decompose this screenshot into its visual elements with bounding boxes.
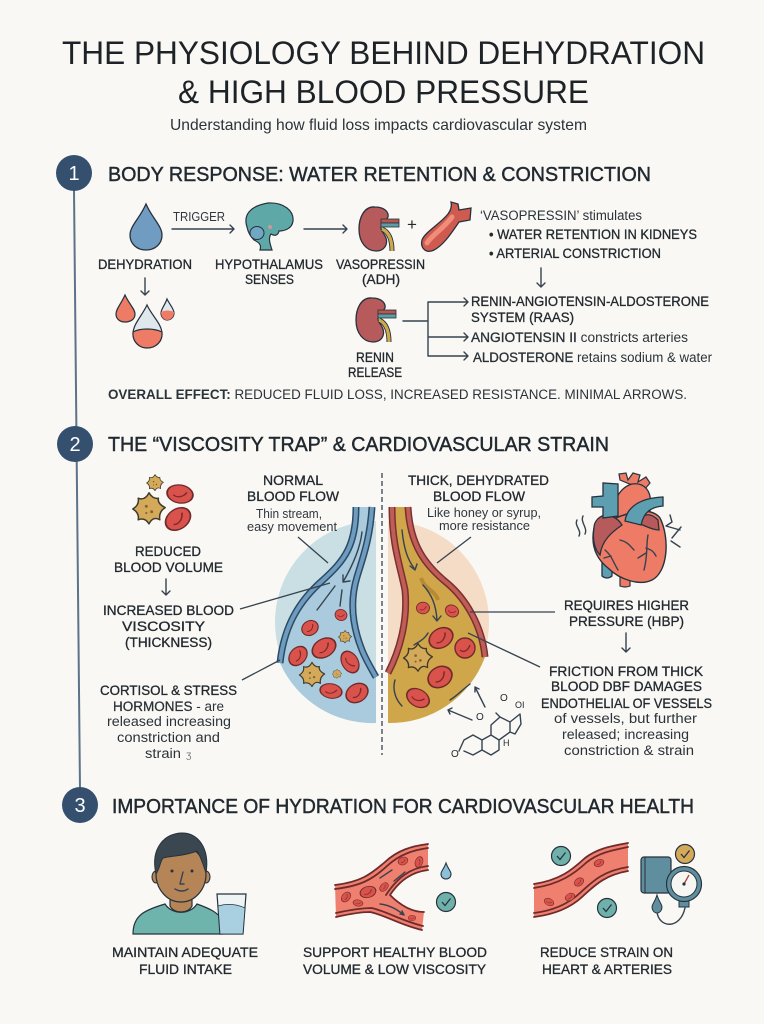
label: vasopressin — [336, 257, 425, 287]
label: requires higher pressure — [564, 598, 689, 629]
label: support healthy blood — [303, 945, 487, 977]
icon: healthy branching vessel — [335, 844, 428, 930]
RAAS text — [471, 294, 712, 365]
label: normal blood flow: Thin stream, — [256, 507, 322, 521]
section 1 number badge: 1 — [68, 163, 80, 185]
icon: water drop small — [441, 863, 451, 879]
title — [62, 35, 705, 110]
RAAS text: ANGIOTENSIN II constricts arteries — [471, 330, 688, 345]
label: requires higher pressure: PRESSURE (HBP) — [569, 614, 684, 629]
icon: hypothalamus brain — [246, 203, 293, 250]
label: maintain fluid intake: FLUID INTAKE — [139, 962, 232, 977]
title: & HIGH BLOOD PRESSURE — [178, 74, 589, 110]
label: friction damage: BLOOD DBF DAMAGES — [551, 679, 702, 694]
label: reduce strain — [540, 945, 673, 977]
label: vasopressin: (ADH) — [362, 272, 400, 287]
label: reduce strain: REDUCE STRAIN ON — [540, 945, 673, 960]
title: THE PHYSIOLOGY BEHIND DEHYDRATION — [62, 35, 705, 71]
label: reduced blood volume: REDUCED — [135, 544, 201, 559]
label: friction damage: of vessels, but further — [554, 711, 698, 726]
label: friction damage: constriction & strain — [564, 743, 694, 758]
section 2 number badge — [57, 426, 93, 462]
label: friction damage — [541, 664, 712, 758]
label: renin release: RELEASE — [348, 365, 402, 380]
icon: cortisol molecule: H — [503, 738, 510, 748]
label: maintain fluid intake: MAINTAIN ADEQUATE — [112, 945, 258, 960]
vasopressin effects text: ‘VASOPRESSIN’ stimulates — [480, 208, 642, 223]
vasopressin effects text — [480, 208, 697, 261]
subtitle: Understanding how fluid loss impacts cardiovascular system — [170, 117, 587, 134]
label: vasopressin: VASOPRESSIN — [336, 257, 425, 272]
label: thick dehydrated blood flow — [408, 473, 549, 533]
label: friction damage: released; increasing — [562, 727, 689, 742]
vasopressin effects text: • WATER RETENTION IN KIDNEYS — [489, 227, 697, 242]
RAAS text: SYSTEM (RAAS) — [471, 310, 574, 325]
icon: relaxed artery — [534, 843, 628, 917]
label: normal blood flow: BLOOD FLOW — [247, 489, 339, 504]
label: cortisol and stress hormones — [100, 683, 237, 761]
RAAS text: ALDOSTERONE retains sodium & water — [473, 350, 712, 365]
icon: cortisol molecule: O — [500, 693, 508, 704]
label: cortisol and stress hormones: released increasing — [107, 714, 231, 729]
label: cortisol and stress hormones: ʒ — [186, 750, 192, 761]
section 2 number badge: 2 — [69, 434, 81, 456]
icon: kidney renin — [356, 298, 396, 342]
label: maintain fluid intake — [112, 945, 258, 977]
label: renin release — [348, 350, 402, 380]
label: requires higher pressure: REQUIRES HIGHER — [564, 598, 689, 613]
label: cortisol and stress hormones: CORTISOL & STRESS — [100, 683, 237, 698]
icon: kidney — [359, 207, 399, 251]
label: normal blood flow: easy movement — [247, 520, 338, 534]
label: cortisol and stress hormones: strain — [145, 746, 181, 761]
panel: normal blood flow — [275, 507, 376, 723]
label: cortisol and stress hormones: HORMONES - are — [113, 699, 224, 714]
icon: artery — [422, 202, 471, 251]
label: increased viscosity: (THICKNESS) — [125, 635, 212, 650]
label: friction damage: ENDOTHELIAL OF VESSELS — [541, 696, 712, 711]
label: reduced blood volume — [114, 544, 223, 575]
label: increased viscosity — [103, 603, 234, 650]
icon: blood drops — [116, 295, 174, 348]
icon: cortisol molecule — [448, 687, 525, 760]
callout lines — [240, 537, 555, 680]
timeline connector — [74, 190, 80, 790]
RAAS text: RENIN-ANGIOTENSIN-ALDOSTERONE — [471, 294, 709, 309]
overall effect: OVERALL EFFECT: REDUCED FLUID LOSS, INCREASED RESISTANCE. MINIMAL ARROWS. — [108, 387, 687, 402]
icon: person with glass of water — [133, 833, 246, 934]
arrow: pressure to friction — [622, 633, 630, 652]
label: cortisol and stress hormones: constriction and — [117, 730, 220, 745]
label: increased viscosity: INCREASED BLOOD — [103, 603, 234, 618]
arrow: effects down — [537, 268, 545, 287]
icon: check marks — [552, 844, 694, 918]
label: thick dehydrated blood flow: more resistance — [439, 519, 530, 533]
label: hypothalamus senses — [215, 257, 323, 287]
icon: blood cells cluster — [133, 475, 195, 535]
label: normal blood flow: NORMAL — [263, 473, 324, 488]
vasopressin effects text: • ARTERIAL CONSTRICTION — [489, 246, 661, 261]
label: reduced blood volume: BLOOD VOLUME — [114, 560, 223, 575]
icon: check — [436, 892, 456, 912]
icon: water drop — [130, 204, 162, 250]
label: dehydration: DEHYDRATION — [98, 257, 192, 272]
label: increased viscosity: VISCOSITY — [122, 619, 205, 634]
icon: cortisol molecule: O — [476, 712, 484, 723]
section 1 number badge — [56, 155, 92, 191]
panel: thick dehydrated blood flow — [388, 507, 489, 723]
trigger label: TRIGGER — [173, 210, 225, 224]
arrow: dehydration down — [141, 278, 149, 295]
label: support healthy blood: SUPPORT HEALTHY BLOOD — [303, 945, 487, 960]
arrow: brain to kidney — [304, 225, 347, 233]
label: normal blood flow — [247, 473, 339, 534]
section 3 number badge — [62, 787, 98, 823]
section 1 heading: BODY RESPONSE: WATER RETENTION & CONSTRICTION — [108, 164, 651, 186]
label: thick dehydrated blood flow: Like honey or syrup, — [427, 506, 541, 520]
icon: blood pressure monitor — [641, 857, 702, 924]
icon: cortisol molecule: OI — [515, 700, 525, 710]
label: thick dehydrated blood flow: BLOOD FLOW — [433, 489, 525, 504]
section 3 heading: IMPORTANCE OF HYDRATION FOR CARDIOVASCULAR HEALTH — [112, 796, 694, 818]
label: renin release: RENIN — [356, 350, 394, 365]
label: thick dehydrated blood flow: THICK, DEHYDRATED — [408, 473, 549, 488]
arrow: trigger — [172, 225, 234, 233]
label: friction damage: FRICTION FROM THICK — [549, 664, 703, 679]
label: hypothalamus senses: SENSES — [245, 272, 294, 287]
icon: cortisol molecule: O — [451, 749, 459, 760]
section 3 number badge: 3 — [74, 795, 86, 817]
plus sign: + — [407, 215, 417, 234]
icon: heart — [576, 473, 681, 587]
arrow: volume to viscosity — [162, 579, 170, 595]
label: hypothalamus senses: HYPOTHALAMUS — [215, 257, 323, 272]
label: reduce strain: HEART & ARTERIES — [542, 962, 672, 977]
divider — [381, 473, 383, 755]
section 2 heading: THE “VISCOSITY TRAP” & CARDIOVASCULAR STRAIN — [108, 434, 609, 456]
label: support healthy blood: VOLUME & LOW VISCOSITY — [303, 962, 486, 977]
arrow: RAAS branches — [403, 298, 468, 360]
